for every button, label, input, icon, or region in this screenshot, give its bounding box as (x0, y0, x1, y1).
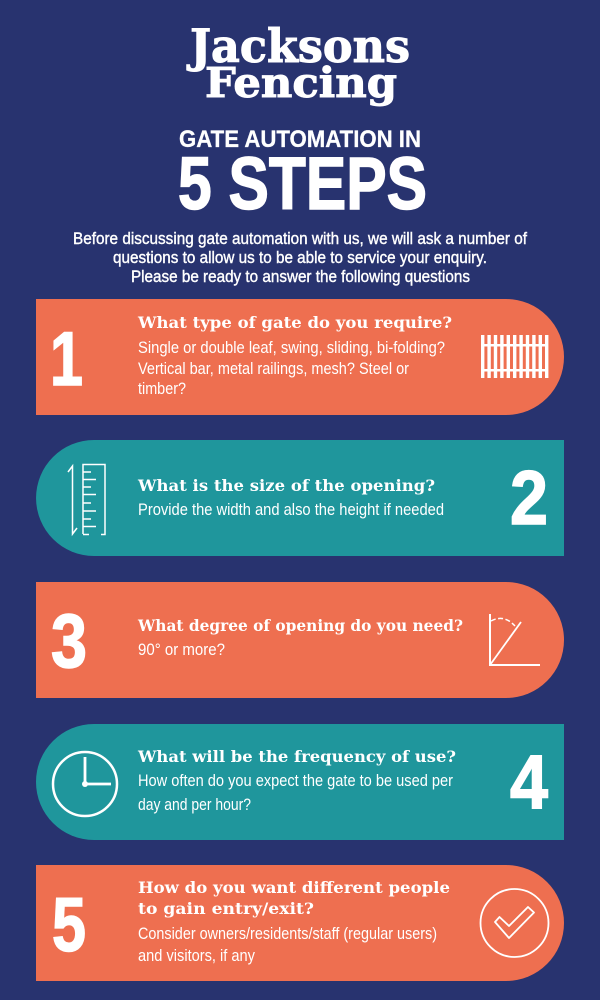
intro text: Before discussing gate automation with us, we will ask a number of (73, 230, 527, 248)
step 5 description: Consider owners/residents/staff (regular users) (138, 925, 437, 943)
title: GATE AUTOMATION IN (179, 126, 421, 153)
step 3 description: 90° or more? (138, 641, 225, 659)
step 1 heading: What type of gate do you require? (137, 313, 452, 332)
step 4 heading: What will be the frequency of use? (137, 747, 456, 766)
intro text: questions to allow us to be able to service your enquiry. (113, 249, 487, 267)
panel: step 2 (36, 440, 564, 556)
step 5 description: and visitors, if any (138, 947, 256, 965)
intro text: Please be ready to answer the following questions (131, 268, 470, 286)
step 4 description: How often do you expect the gate to be used per (138, 772, 453, 790)
intro text (73, 230, 527, 286)
step number 1: 1 (50, 317, 83, 402)
step 4 description: day and per hour? (138, 796, 251, 814)
icon: ruler (68, 464, 105, 534)
logo: Jacksons Fencing: Fencing (205, 59, 397, 107)
step 5 description (138, 925, 437, 965)
icon: angle (490, 614, 540, 665)
panel: step 5 (36, 865, 564, 981)
step 1 description: Single or double leaf, swing, sliding, bi-folding? (138, 339, 445, 357)
icon: gate (481, 335, 548, 378)
step 1 description: timber? (138, 380, 186, 398)
step number 4: 4 (510, 740, 548, 825)
panel: step 3 (36, 582, 564, 698)
step number 5: 5 (52, 883, 86, 968)
step 4 description (138, 772, 453, 814)
step 5 heading (138, 878, 450, 918)
step 2 description: Provide the width and also the height if needed (138, 501, 444, 519)
step 3 heading: What degree of opening do you need? (137, 616, 463, 635)
step number 3: 3 (51, 599, 87, 684)
logo: Jacksons Fencing (186, 19, 410, 107)
step number 2: 2 (510, 456, 548, 541)
step 5 heading: to gain entry/exit? (138, 899, 314, 918)
logo: Jacksons Fencing: Jacksons (186, 19, 410, 73)
step 1 description (138, 339, 445, 398)
step 2 heading: What is the size of the opening? (137, 476, 435, 495)
panel: step 4 (36, 724, 564, 840)
title: 5 STEPS (178, 142, 427, 225)
icon: clock (53, 752, 117, 816)
step 5 heading: How do you want different people (138, 878, 450, 897)
step 1 description: Vertical bar, metal railings, mesh? Steel or (138, 360, 409, 378)
icon: check in circle (480, 889, 548, 957)
panel: step 1 (36, 299, 564, 415)
